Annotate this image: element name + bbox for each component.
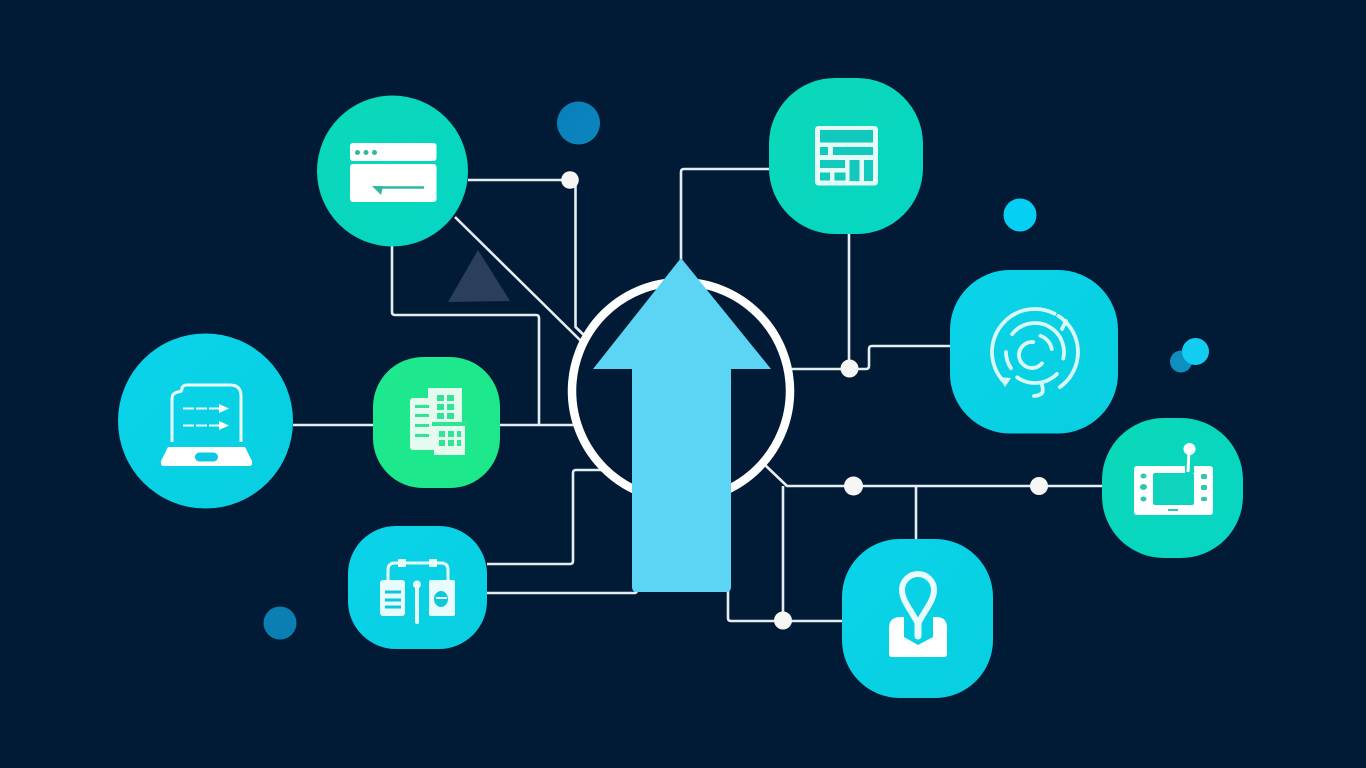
junction dots bbox=[561, 171, 1048, 629]
decorative dots: overlapping pair bbox=[1170, 338, 1209, 372]
central ring bbox=[572, 282, 790, 500]
icon: table layout bbox=[815, 126, 878, 186]
decorative triangle bbox=[448, 250, 510, 302]
node: linked files bbox=[348, 526, 487, 649]
node: laptop bbox=[118, 334, 293, 508]
decorative dot: blue bottom left bbox=[264, 606, 296, 640]
node: location pin bbox=[842, 539, 993, 698]
connector lines bbox=[293, 169, 1102, 621]
icon: circular maze bbox=[974, 291, 1096, 413]
icon: linked files bbox=[380, 559, 455, 622]
icon: laptop with document bbox=[161, 385, 252, 466]
icon: tablet device with antenna bbox=[1134, 443, 1213, 515]
central upward arrow bbox=[593, 258, 771, 592]
decorative dot: cyan top right bbox=[1004, 198, 1036, 232]
node: table bbox=[769, 78, 923, 234]
node: browser window bbox=[317, 96, 468, 246]
icon: location pin over tray bbox=[889, 574, 947, 657]
icon: browser window bbox=[350, 143, 436, 202]
node: tablet device bbox=[1102, 418, 1243, 558]
node: documents and buildings bbox=[373, 357, 500, 488]
decorative dot: blue top bbox=[557, 102, 600, 144]
icon: documents and buildings bbox=[410, 388, 468, 455]
node: circular maze bbox=[950, 270, 1118, 434]
